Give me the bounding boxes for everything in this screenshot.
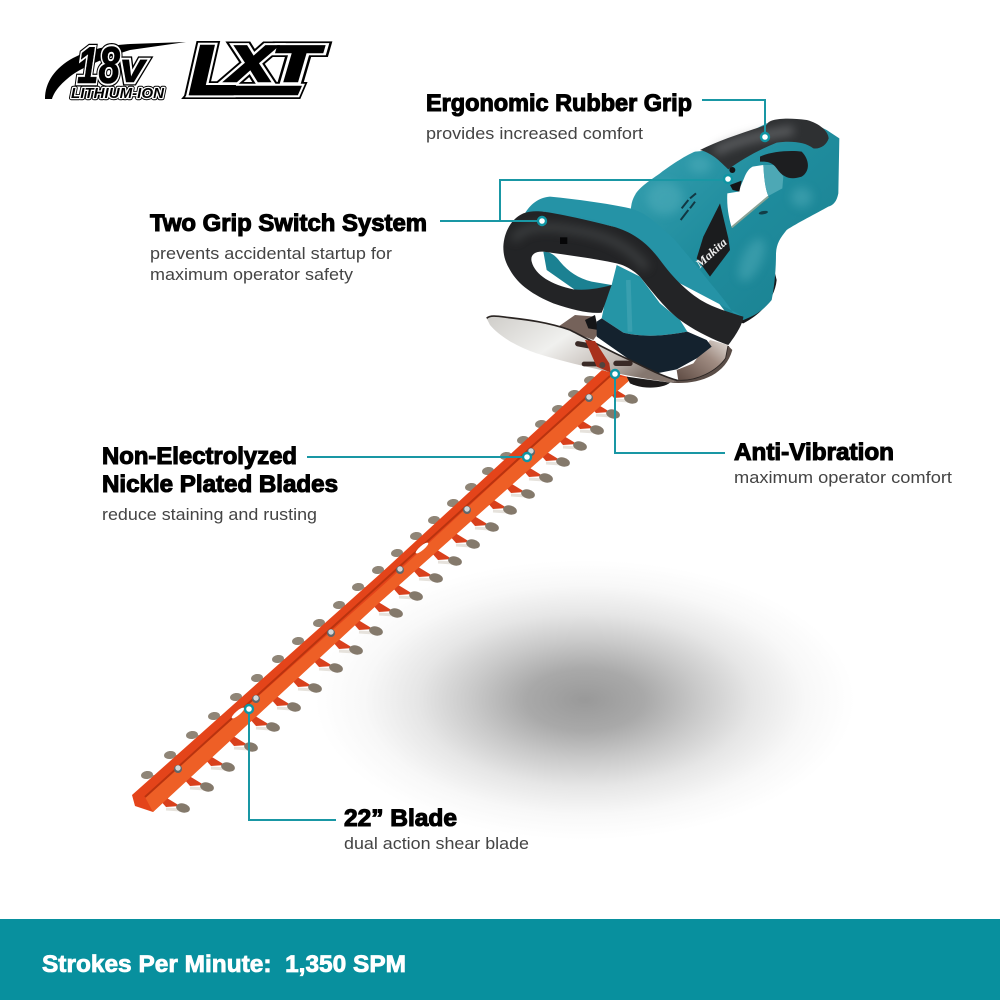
callout: non-electrolyzed blades: Non-Electrolyzed	[102, 443, 297, 470]
makita label	[692, 203, 730, 277]
callout: two grip switch system: maximum operator safety	[150, 266, 354, 284]
vents	[681, 193, 696, 220]
callout: 22 inch blade	[344, 805, 529, 853]
logo: 18V Lithium-Ion: LITHIUM-ION	[71, 86, 165, 102]
logo: 18V Lithium-Ion: 18	[77, 37, 120, 95]
callout: two grip switch system: prevents accidental startup for	[150, 245, 393, 263]
logo: 18V Lithium-Ion: LITHIUM-ION	[71, 86, 165, 102]
rubber grip	[700, 119, 829, 169]
rear section	[630, 119, 839, 323]
front section	[487, 197, 743, 388]
callout lines	[249, 100, 765, 820]
callout: 22 inch blade: dual action shear blade	[344, 835, 529, 853]
housing highlights	[647, 157, 812, 285]
logo: LXT	[189, 31, 325, 109]
back metal and knobs	[558, 315, 598, 340]
floor shadow	[315, 560, 855, 840]
under-shield part	[627, 377, 670, 388]
callout: anti-vibration: Anti-Vibration	[734, 439, 894, 466]
base shadow strip	[730, 273, 777, 323]
logo: LXT: X	[225, 36, 276, 92]
callout: non-electrolyzed blades: Nickle Plated Blades	[102, 471, 338, 498]
handle inner wall	[763, 165, 783, 196]
logo: 18V Lithium-Ion: LITHIUM-ION	[71, 86, 165, 102]
logo: 18V Lithium-Ion: v	[120, 44, 148, 91]
logo: 18V Lithium-Ion: 18	[77, 37, 120, 95]
guide bar	[132, 370, 632, 812]
callout: ergonomic rubber grip: provides increased comfort	[426, 125, 643, 143]
callout: ergonomic rubber grip	[426, 90, 692, 143]
logo: 18V Lithium-Ion: v	[120, 44, 148, 91]
hedge trimmer body	[487, 119, 839, 388]
lower cutter teeth	[159, 386, 639, 814]
callout: anti-vibration: maximum operator comfort	[734, 469, 952, 487]
rear handle inner grip	[760, 151, 808, 178]
logo: 18V Lithium-Ion: 18	[77, 37, 120, 95]
callout: two grip switch system: Two Grip Switch System	[150, 210, 427, 237]
bolts and slots	[174, 394, 593, 773]
callout: 22 inch blade: 22” Blade	[344, 805, 457, 832]
footer band: Strokes Per Minute: 1,350 SPM	[42, 951, 406, 978]
logo: LXT: L	[189, 31, 239, 109]
logo: LXT: L	[189, 31, 239, 109]
rear handle opening	[727, 165, 768, 227]
callout: anti-vibration	[734, 439, 952, 487]
footer band	[0, 919, 1000, 1000]
logo: LXT: L	[189, 31, 239, 109]
logo: LXT: X	[225, 36, 276, 92]
callout: non-electrolyzed blades: reduce staining and rusting	[102, 506, 317, 524]
callout: non-electrolyzed blades	[102, 443, 338, 524]
gear housing	[597, 318, 712, 373]
red blade mount	[585, 340, 611, 373]
logo: LXT: T	[272, 36, 325, 92]
shield slots	[575, 341, 633, 366]
logo: LXT: T	[272, 36, 325, 92]
trigger switch	[729, 167, 742, 192]
logo: 18V Lithium-Ion	[45, 37, 186, 102]
callout dots	[245, 133, 769, 713]
logo: LXT: T	[272, 36, 325, 92]
safety shield	[487, 316, 678, 383]
front handle rubber	[503, 211, 743, 345]
neck housing	[602, 265, 687, 336]
front handle teal band	[525, 197, 743, 317]
logo: 18V Lithium-Ion: v	[120, 44, 148, 91]
callout: ergonomic rubber grip: Ergonomic Rubber Grip	[426, 90, 692, 117]
upper cutter teeth	[141, 375, 602, 780]
metal plate	[677, 340, 728, 381]
rear body housing	[630, 120, 839, 320]
hedge trimmer blade bar	[132, 370, 639, 814]
callout: two grip switch system	[150, 210, 427, 284]
makita label: Makita	[692, 235, 730, 271]
rear loop inner	[543, 252, 612, 293]
logo: LXT: X	[225, 36, 276, 92]
